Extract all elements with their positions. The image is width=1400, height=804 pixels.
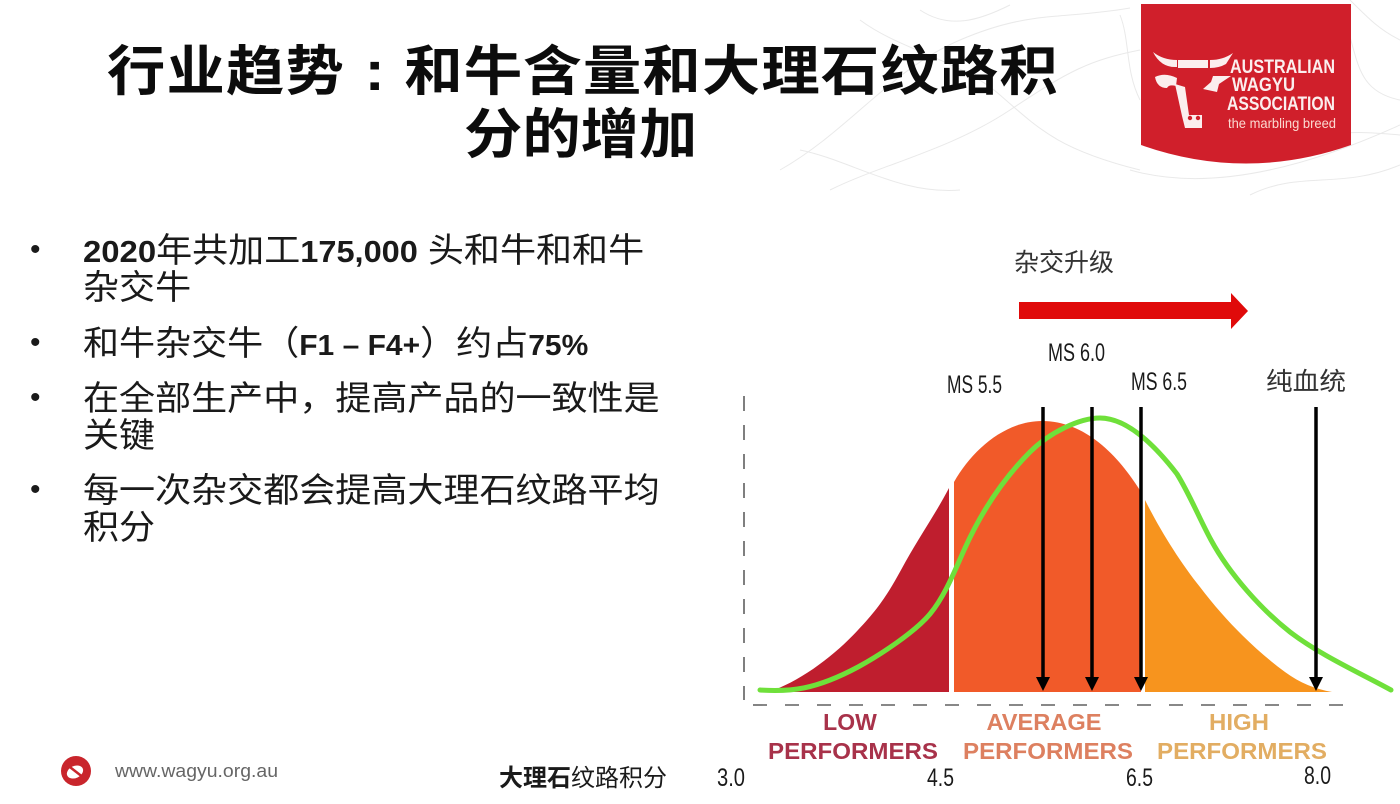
- x axis values: [717, 762, 1331, 792]
- title: 分的增加: [464, 105, 697, 165]
- category labels: PERFORMERS: [1157, 738, 1327, 764]
- bullet list: [30, 232, 660, 547]
- icon: logo roundel: [61, 756, 91, 786]
- category labels: AVERAGE: [986, 709, 1102, 735]
- category labels: LOW: [823, 709, 877, 735]
- green curve: shifted distribution: [760, 418, 1391, 691]
- bullet 3: 关键: [83, 417, 155, 455]
- logo: Australian Wagyu Association: AUSTRALIAN: [1230, 57, 1335, 78]
- marker labels: MS 6.0: [1048, 339, 1105, 367]
- title: :: [365, 39, 385, 102]
- title: [107, 39, 1059, 165]
- title: 行业趋势 和牛含量和大理石纹路积: [107, 42, 1059, 102]
- axis dashes: [743, 396, 745, 700]
- arrow: MS 5.5: [1036, 407, 1050, 691]
- bullet list: •: [30, 381, 41, 414]
- arrow: purebred: [1309, 407, 1323, 691]
- footer: website: [61, 756, 278, 786]
- bullet list: •: [30, 326, 41, 359]
- bullet 1: 2020年共加工175,000 头和牛和和牛: [83, 232, 644, 270]
- marker labels: [947, 339, 1346, 399]
- x axis title: 大理石纹路积分: [499, 765, 667, 792]
- logo: Australian Wagyu Association: [1141, 4, 1351, 164]
- bullet 1: 杂交牛: [83, 269, 191, 307]
- average performers area: [954, 421, 1141, 692]
- category labels: [768, 709, 1327, 764]
- bullet list: •: [30, 233, 41, 266]
- arrow: upgrade direction: [1019, 293, 1248, 329]
- x axis values: 4.5: [927, 764, 954, 792]
- label: crossbreeding upgrade: 杂交升级: [1014, 249, 1114, 277]
- high performers area: [1145, 500, 1332, 692]
- x axis values: 3.0: [717, 764, 745, 792]
- bullet 2: 和牛杂交牛（F1 – F4+）约占75%: [83, 325, 588, 363]
- arrow: MS 6.5: [1134, 407, 1148, 691]
- x axis values: 8.0: [1304, 762, 1331, 790]
- logo: Australian Wagyu Association: WAGYU: [1232, 75, 1295, 96]
- logo: Australian Wagyu Association: the marbling breed: [1228, 115, 1336, 131]
- bullet 4: [83, 472, 660, 547]
- category labels: HIGH: [1209, 709, 1269, 735]
- bullet 3: [83, 380, 660, 455]
- footer: website: www.wagyu.org.au: [114, 761, 278, 781]
- category labels: PERFORMERS: [768, 738, 938, 764]
- bullet 4: 积分: [83, 509, 155, 547]
- bullet 1: [83, 232, 644, 307]
- arrow: MS 6.0: [1085, 407, 1099, 691]
- bullet 4: 每一次杂交都会提高大理石纹路平均: [83, 472, 660, 510]
- marker labels: 纯血统: [1266, 368, 1346, 396]
- bullet 3: 在全部生产中，提高产品的一致性是: [83, 380, 660, 418]
- bullet list: •: [30, 473, 41, 506]
- category labels: PERFORMERS: [963, 738, 1133, 764]
- marker labels: MS 6.5: [1131, 368, 1187, 396]
- x axis values: 6.5: [1126, 764, 1153, 792]
- marker labels: MS 5.5: [947, 371, 1002, 399]
- low performers area: [768, 488, 949, 692]
